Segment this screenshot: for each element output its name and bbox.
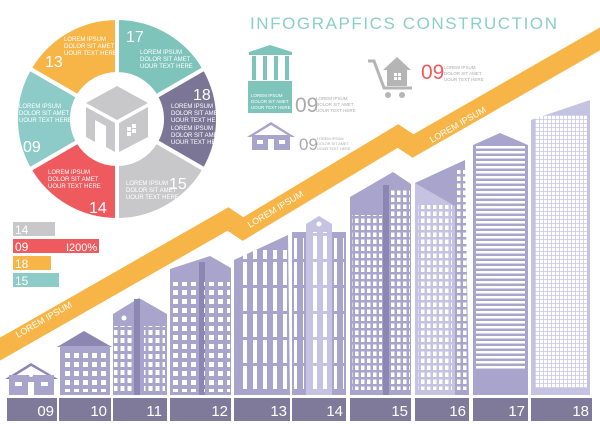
donut chart: UOUR TEXT HERE [171, 140, 224, 146]
icon: bank with text box: 09 [295, 94, 318, 117]
donut chart: UOUR TEXT HERE [19, 118, 72, 124]
icon: cart with house: LOREM IPSUM [444, 65, 476, 70]
donut chart: 17 [126, 29, 144, 46]
donut chart: LOREM IPSUM [171, 126, 213, 132]
text: 12 [211, 403, 228, 420]
title: INFOGRAPFICS CONSTRUCTION [250, 14, 557, 33]
building 16 [415, 160, 469, 395]
donut chart: LOREM IPSUM [19, 104, 61, 110]
donut chart: UOUR TEXT HERE [48, 184, 101, 190]
icon: bank with text box: UOUR TEXT HERE [251, 105, 291, 110]
bar legend: 15 [15, 274, 29, 288]
donut chart: 18 [193, 87, 211, 104]
donut chart: LOREM IPSUM [126, 181, 168, 187]
segment 17 [117, 18, 204, 96]
donut chart: DOLOR SIT AMET [64, 44, 115, 50]
donut chart: UOUR TEXT HERE [171, 118, 224, 124]
building 15 [350, 172, 411, 395]
donut chart: DOLOR SIT AMET [48, 177, 99, 183]
segment 14 [30, 142, 117, 220]
text: 09 [37, 403, 54, 420]
text: 11 [146, 403, 162, 420]
building 14 [292, 216, 346, 395]
donut chart: UOUR TEXT HERE [140, 64, 193, 70]
text: 13 [270, 403, 287, 420]
text: 14 [326, 403, 343, 420]
donut chart: UOUR TEXT HERE [64, 51, 117, 57]
donut chart: DOLOR SIT AMET [171, 111, 222, 117]
icon: cart with house: 09 [421, 61, 444, 84]
donut chart: DOLOR SIT AMET [171, 133, 222, 139]
icon: small house: DOLOR SIT AMET [317, 142, 349, 146]
text: 18 [572, 403, 589, 420]
band label left: LOREM IPSUM [14, 300, 74, 340]
icon: bank with text box [248, 45, 356, 117]
icon: small house [247, 122, 351, 154]
segment 09 [16, 68, 78, 170]
text: 16 [449, 403, 466, 420]
donut chart: LOREM IPSUM [64, 37, 106, 43]
building 09 [5, 363, 58, 395]
donut chart: LOREM IPSUM [48, 170, 90, 176]
building 10 [57, 331, 112, 395]
bar legend: 09 [15, 240, 29, 254]
building 18 [531, 100, 590, 395]
building 11 [113, 298, 167, 395]
building 12 [170, 256, 231, 395]
icon: small house: 09 [299, 135, 318, 154]
icon: bank with text box: UOUR TEXT HERE [316, 108, 356, 113]
donut chart: 13 [45, 54, 63, 71]
bar legend: I200% [66, 242, 97, 254]
donut chart: DOLOR SIT AMET [140, 57, 191, 63]
text: 10 [90, 403, 107, 420]
icon: small house: LOREM IPSUM [317, 137, 344, 141]
band label right: LOREM IPSUM [428, 105, 488, 145]
donut chart: DOLOR SIT AMET [19, 111, 70, 117]
building 13 [234, 235, 290, 395]
donut chart: 09 [23, 139, 41, 156]
orange growth band [0, 36, 600, 352]
bar legend [13, 222, 99, 288]
icon: bank with text box: DOLOR SIT AMET [316, 102, 354, 107]
building 17 [473, 133, 528, 395]
icon: cart with house: UOUR TEXT HERE [444, 77, 484, 82]
donut chart: LOREM IPSUM [171, 104, 213, 110]
donut chart: UOUR TEXT HERE [126, 195, 179, 201]
buildings [5, 100, 590, 395]
icon: cart with house [368, 57, 484, 98]
donut chart [16, 18, 224, 220]
text: 15 [391, 403, 408, 420]
icon: bank with text box: LOREM IPSUM [316, 96, 348, 101]
icon: small house: UOUR TEXT HERE [317, 147, 351, 151]
icon: bank with text box: DOLOR SIT AMET [251, 99, 289, 104]
bar legend: 14 [15, 223, 29, 237]
bar legend: 18 [15, 257, 29, 271]
text: 17 [508, 403, 525, 420]
donut chart: 15 [169, 176, 187, 193]
segment 13 [30, 18, 117, 97]
icon: bank with text box: LOREM IPSUM [251, 93, 283, 98]
donut chart: LOREM IPSUM [140, 50, 182, 56]
segment 15 [117, 142, 204, 220]
donut chart: DOLOR SIT AMET [126, 188, 177, 194]
band label middle: LOREM IPSUM [246, 189, 305, 230]
icon: house cube [86, 86, 148, 152]
year label bars [7, 398, 592, 421]
icon: cart with house: DOLOR SIT AMET [444, 71, 482, 76]
donut chart: 14 [89, 200, 107, 217]
segment 18 [156, 68, 218, 170]
